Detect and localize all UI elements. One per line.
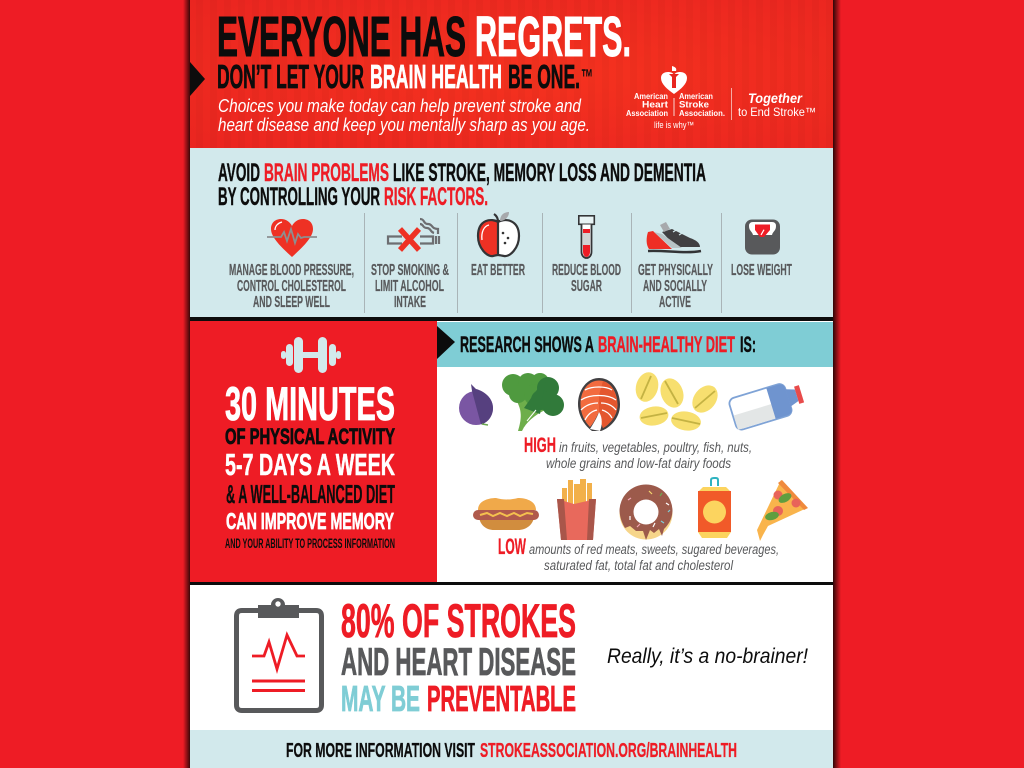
label: get physically active: GET PHYSICALLY bbox=[638, 262, 713, 279]
logo: Together to End Stroke: to End Stroke™ bbox=[738, 105, 816, 119]
logo: American Heart Association: American bbox=[634, 92, 668, 101]
header intro text: heart disease and keep you mentally sharp as you age. bbox=[218, 115, 590, 135]
text: 80% of strokes: 80% OF STROKES bbox=[341, 594, 576, 647]
heading: avoid brain problems: LIKE STROKE, MEMORY LOSS AND DEMENTIA bbox=[393, 159, 706, 187]
subtitle: BRAIN HEALTH bbox=[370, 59, 502, 96]
icon: heart and torch logo bbox=[661, 66, 687, 94]
panel: brain-healthy diet bbox=[437, 321, 833, 582]
logo: American Heart Association: Heart bbox=[642, 100, 668, 110]
text: high in bbox=[524, 434, 752, 471]
icon: broccoli bbox=[502, 373, 564, 431]
label: manage blood pressure: AND SLEEP WELL bbox=[253, 294, 330, 311]
icon: salmon steak bbox=[578, 378, 620, 431]
logo: Together to End Stroke: Together bbox=[748, 90, 803, 106]
icon: milk bottle bbox=[728, 378, 806, 431]
banner: research shows bbox=[437, 322, 833, 367]
label: reduce blood sugar bbox=[552, 262, 621, 295]
text: may be preventable: MAY BE bbox=[341, 678, 420, 719]
label: manage blood pressure: MANAGE BLOOD PRESSURE, bbox=[229, 262, 354, 279]
heading: avoid brain problems: BY CONTROLLING YOUR bbox=[218, 183, 380, 211]
logo: American Stroke Association bbox=[679, 92, 725, 118]
icon: clipboard bbox=[236, 598, 322, 710]
header intro text: Choices you make today can help prevent stroke and bbox=[218, 96, 582, 116]
text: low in: saturated fat, total fat and cholesterol bbox=[544, 558, 734, 573]
banner: research shows: BRAIN-HEALTHY DIET bbox=[598, 332, 735, 357]
panel: 30 minutes of activity: & A WELL-BALANCED DIET bbox=[226, 479, 395, 509]
label: stop smoking: LIMIT ALCOHOL bbox=[375, 278, 444, 295]
text: low in bbox=[498, 534, 779, 573]
text: of physical activity: OF PHYSICAL ACTIVITY bbox=[225, 424, 395, 449]
text: high in: whole grains and low-fat dairy foods bbox=[546, 456, 731, 471]
icon: running shoe bbox=[647, 222, 701, 252]
label: reduce blood sugar: SUGAR bbox=[571, 278, 602, 295]
label: manage blood pressure bbox=[229, 262, 354, 311]
header intro text bbox=[218, 96, 590, 135]
logo: Together to End Stroke bbox=[738, 90, 816, 119]
text: no-brainer: Really, it’s a no-brainer! bbox=[607, 645, 808, 668]
logo: American Heart Association: Association bbox=[626, 109, 668, 118]
text: ability to process information: AND YOUR ABILITY TO PROCESS INFORMATION bbox=[225, 536, 395, 551]
label: reduce blood sugar: REDUCE BLOOD bbox=[552, 262, 621, 279]
label: stop smoking: INTAKE bbox=[394, 294, 426, 311]
heading: avoid brain problems bbox=[218, 159, 706, 211]
logo: American Stroke Association: Stroke bbox=[679, 100, 709, 110]
title: REGRETS. bbox=[475, 5, 631, 69]
title: EVERYONE HAS bbox=[217, 5, 466, 69]
text: low in: amounts of red meats, sweets, sugared beverages, bbox=[529, 542, 779, 557]
text: may be preventable bbox=[341, 678, 576, 719]
heading: avoid brain problems: BRAIN PROBLEMS bbox=[264, 159, 389, 187]
icon: heart with pulse bbox=[267, 219, 317, 257]
logo tagline: life is why™ bbox=[654, 120, 694, 130]
subtitle: BE ONE. bbox=[508, 59, 580, 96]
logo: American Stroke Association: American bbox=[679, 92, 713, 101]
label: manage blood pressure: CONTROL CHOLESTEROL bbox=[237, 278, 346, 295]
icon: dumbbell bbox=[281, 337, 341, 373]
icon: test tube bbox=[579, 216, 594, 258]
label: lose weight: LOSE WEIGHT bbox=[731, 262, 792, 279]
subtitle: DON’T LET YOUR bbox=[217, 59, 364, 96]
label: get physically active: ACTIVE bbox=[659, 294, 691, 311]
icon: soda can bbox=[698, 478, 731, 538]
icon: no smoking bbox=[388, 219, 439, 250]
banner: research shows: RESEARCH SHOWS A bbox=[460, 332, 594, 357]
heading: avoid brain problems: AVOID bbox=[218, 159, 260, 187]
logo: American Heart Association bbox=[626, 92, 668, 118]
subtitle: ™ bbox=[581, 64, 593, 90]
panel: 80 percent preventable bbox=[190, 585, 833, 730]
icon: weight scale bbox=[745, 220, 780, 254]
text: and heart disease: AND HEART DISEASE bbox=[341, 641, 576, 684]
text: low in: LOW bbox=[498, 534, 526, 559]
panel: footer bbox=[190, 730, 833, 768]
label: stop smoking: STOP SMOKING & bbox=[371, 262, 449, 279]
label: stop smoking bbox=[371, 262, 449, 311]
text: high in: in fruits, vegetables, poultry, fish, nuts, bbox=[559, 440, 752, 455]
text: may be preventable: PREVENTABLE bbox=[427, 678, 576, 719]
text: 30 minutes: 30 MINUTES bbox=[225, 377, 395, 430]
icon: apple bbox=[478, 212, 519, 256]
icon: onion bbox=[459, 384, 493, 425]
panel: 30 minutes of activity bbox=[190, 321, 437, 582]
icon: hot dog bbox=[473, 498, 539, 530]
panel: risk factors bbox=[190, 148, 833, 317]
text: more information: FOR MORE INFORMATION VISIT bbox=[286, 739, 475, 762]
text: can improve memory: CAN IMPROVE MEMORY bbox=[226, 508, 394, 534]
heading: avoid brain problems: RISK FACTORS. bbox=[384, 183, 488, 211]
logo: American Stroke Association: Association. bbox=[679, 109, 725, 118]
text: 5-7 days a week: 5-7 DAYS A WEEK bbox=[225, 448, 395, 482]
banner: research shows: IS: bbox=[740, 332, 756, 357]
arrow: header marker bbox=[190, 62, 205, 96]
icon: pizza slice bbox=[757, 480, 808, 541]
icon: whole grains bbox=[632, 370, 723, 432]
icon: french fries bbox=[557, 479, 596, 540]
label: eat better: EAT BETTER bbox=[471, 262, 525, 279]
label: get physically active: AND SOCIALLY bbox=[643, 278, 707, 295]
label: get physically active bbox=[638, 262, 713, 311]
panel: header bbox=[190, 0, 833, 148]
text: more information: STROKEASSOCIATION.ORG/BRAINHEALTH bbox=[480, 739, 737, 762]
icon: donut bbox=[620, 485, 672, 540]
text: high in: HIGH bbox=[524, 434, 556, 457]
